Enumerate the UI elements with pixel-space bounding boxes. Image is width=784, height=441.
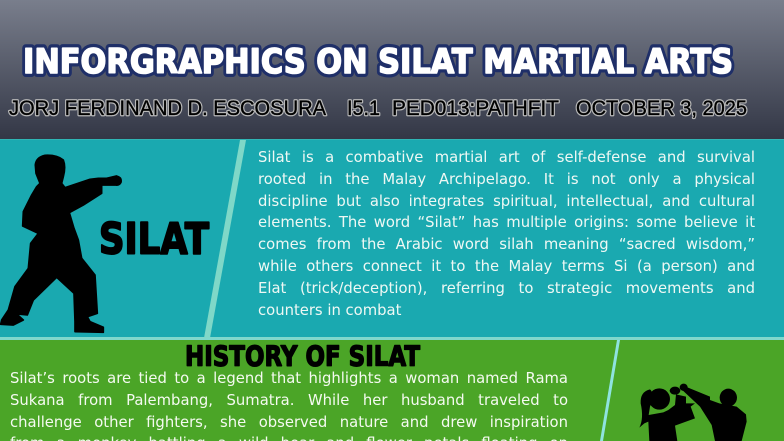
author and course line: OCTOBER 3, 2025 xyxy=(576,97,747,120)
header band xyxy=(0,0,784,139)
panel: history of silat xyxy=(0,340,784,441)
history text: Silat’s roots are tied to a legend that highlights a woman named Rama xyxy=(10,370,568,387)
history text: Sukana from Palembang, Sumatra. While her husband traveled to xyxy=(10,392,568,409)
definition text: Elat (trick/deception), referring to strategic movements and xyxy=(258,280,755,297)
author and course line xyxy=(8,97,748,120)
author and course line: JORJ FERDINAND D. ESCOSURA xyxy=(9,97,326,120)
author and course line: PED013:PATHFIT xyxy=(392,97,559,120)
author and course line: I5.1 xyxy=(347,97,380,120)
definition text: discipline but also integrates spiritual, intellectual, and cultural xyxy=(258,193,755,210)
definition text: counters in combat xyxy=(258,302,401,319)
definition text xyxy=(258,149,755,319)
author and course line: PED013:PATHFIT xyxy=(392,97,559,120)
SILAT label: SILAT xyxy=(99,214,210,264)
diagonal stripe xyxy=(600,340,620,441)
definition text: while others connect it to the Malay terms Si (a person) and xyxy=(258,258,755,275)
author and course line: I5.1 xyxy=(347,97,380,120)
history heading: HISTORY OF SILAT xyxy=(185,340,420,372)
icon: child martial artist silhouette xyxy=(0,154,122,334)
author and course line: JORJ FERDINAND D. ESCOSURA xyxy=(9,97,326,120)
definition text: comes from the Arabic word silah meaning “sacred wisdom,” xyxy=(258,236,755,253)
diagonal stripe xyxy=(204,140,246,337)
author and course line: OCTOBER 3, 2025 xyxy=(576,97,747,120)
definition text: elements. The word “Silat” has multiple origins: some believe it xyxy=(258,214,755,231)
panel bottom edge xyxy=(0,337,784,340)
history text xyxy=(10,370,568,441)
definition text: rooted in the Malay Archipelago. It is not only a physical xyxy=(258,171,755,188)
history text: challenge other fighters, she observed nature and drew inspiration xyxy=(10,414,568,431)
icon: two fighters silhouette xyxy=(639,384,747,441)
definition text: Silat is a combative martial art of self-defense and survival xyxy=(258,149,755,166)
panel: what is silat xyxy=(0,139,784,340)
